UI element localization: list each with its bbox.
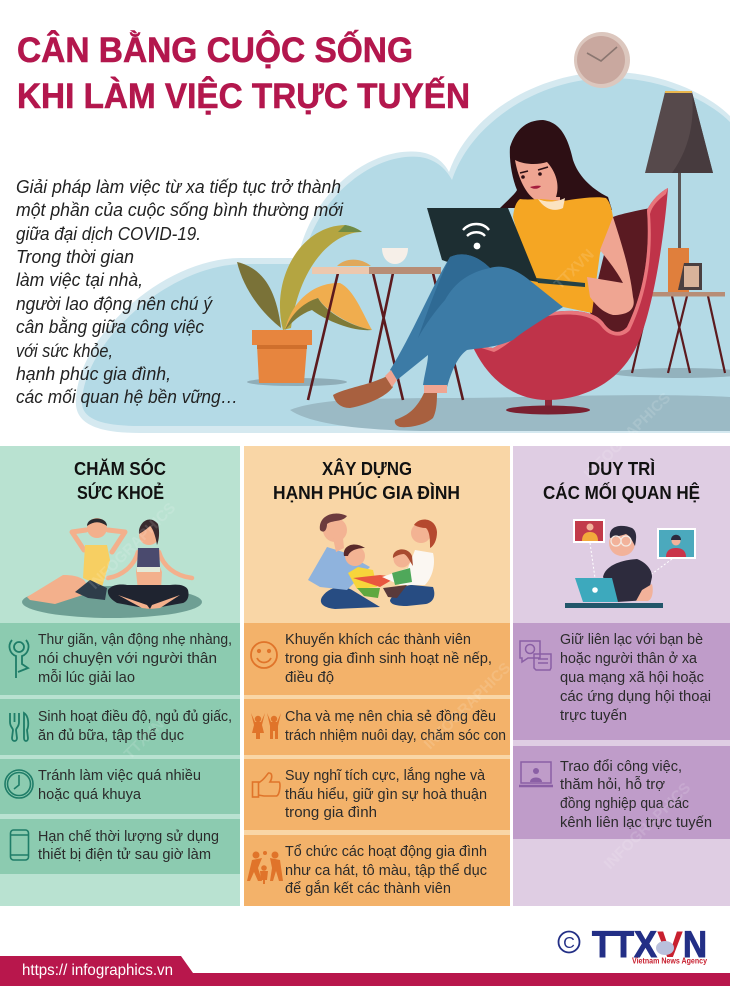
heading: maintaining relationships: [543, 458, 700, 503]
row: keep in touch: các ứng dụng hội thoại: [560, 688, 711, 705]
row: positive thinking: trong gia đình: [285, 804, 377, 821]
watermarks: INFOGRAPHICS: [601, 779, 694, 873]
row: limit devices: Hạn chế thời lượng sử dụng: [38, 828, 219, 845]
icon: smiley: [251, 642, 277, 668]
row: keep in touch: Giữ liên lạc với bạn bè: [560, 631, 703, 648]
row: family activities: [244, 835, 510, 906]
heading: maintaining relationships: CÁC MỐI QUAN HỆ: [543, 482, 700, 503]
row: share parenting: trách nhiệm nuôi dạy, chăm sóc con: [285, 727, 506, 744]
logo: TTXVN copyright: TTX: [592, 924, 657, 965]
watermarks: INFOGRAPHICS: [421, 659, 514, 753]
heading: health care: CHĂM SÓC: [74, 458, 166, 479]
icon: family playing: [247, 851, 283, 884]
row: family activities: như ca hát, tô màu, tập thể dục: [285, 862, 487, 879]
intro text block: làm việc tại nhà,: [16, 270, 143, 290]
row: work exchange: thăm hỏi, hỗ trợ: [560, 776, 665, 793]
intro text block: người lao động nên chú ý: [16, 294, 213, 314]
logo: TTXVN copyright: C: [563, 935, 575, 952]
icon: clock: [5, 770, 33, 798]
panel: maintaining relationships: [513, 446, 730, 906]
watermarks: [86, 246, 694, 873]
row: family activities: Tổ chức các hoạt động gia đình: [285, 843, 487, 860]
heading: family happiness: [273, 458, 460, 503]
title: KHI LÀM VIỆC TRỰC TUYẾN: [17, 76, 470, 116]
row: routine: ăn đủ bữa, tập thể dục: [38, 727, 184, 744]
row: relax: Thư giãn, vận động nhẹ nhàng,: [38, 631, 232, 648]
panel: health care: [0, 446, 240, 906]
icon: laptop video meeting: [519, 762, 553, 786]
illustration: couple exercising: [22, 518, 202, 618]
icon: chat bubbles: [520, 641, 551, 670]
illustration: woman with laptop: [333, 120, 634, 427]
intro text block: một phần của cuộc sống bình thường mới: [16, 200, 344, 220]
row: encourage: trong gia đình sinh hoạt nề nếp,: [285, 650, 492, 667]
footer band with URL: [0, 956, 730, 986]
row: keep in touch: hoặc người thân ở xa: [560, 650, 698, 667]
icon: fork and knife: [10, 713, 28, 741]
icon: thumbs up: [252, 773, 280, 797]
title: [17, 30, 470, 116]
intro text block: cân bằng giữa công việc: [16, 317, 204, 337]
heading: family happiness: XÂY DỰNG: [322, 458, 412, 479]
title: CÂN BẰNG CUỘC SỐNG: [17, 30, 413, 70]
heading: family happiness: HẠNH PHÚC GIA ĐÌNH: [273, 482, 460, 503]
footer band with URL: https:// infographics.vn: [22, 962, 173, 979]
icon: smartphone: [10, 830, 28, 860]
watermarks: TTXVN: [121, 716, 168, 763]
illustration: man on video call: [565, 519, 696, 608]
heading: health care: [74, 458, 166, 503]
logo: TTXVN copyright: N: [683, 924, 707, 965]
row: keep in touch: qua mạng xã hội hoặc: [560, 669, 704, 686]
background cloud shape: [76, 72, 730, 433]
intro text block: [16, 177, 344, 407]
row: routine: Sinh hoạt điều độ, ngủ đủ giấc,: [38, 708, 232, 725]
row: work exchange: đồng nghiệp qua các: [560, 795, 689, 812]
icon: wall clock: [574, 32, 630, 88]
row: positive thinking: [244, 759, 510, 830]
row: work exchange: Trao đổi công việc,: [560, 758, 682, 775]
row: work exchange: kênh liên lạc trực tuyến: [560, 814, 712, 831]
intro text block: các mối quan hệ bền vững…: [16, 387, 238, 407]
row: avoid overwork: Tránh làm việc quá nhiều: [38, 767, 201, 784]
heading: maintaining relationships: DUY TRÌ: [588, 458, 655, 479]
row: positive thinking: Suy nghĩ tích cực, lắng nghe và: [285, 767, 486, 784]
intro text block: Trong thời gian: [16, 247, 134, 267]
row: work exchange: [513, 746, 730, 839]
row: relax: nói chuyện với người thân: [38, 650, 217, 667]
row: share parenting: Cha và mẹ nên chia sẻ đồng đều: [285, 708, 496, 725]
row: routine: [0, 699, 240, 755]
row: encourage: điều độ: [285, 669, 334, 686]
watermarks: INFOGRAPHICS: [581, 389, 674, 483]
row: keep in touch: trực tuyến: [560, 707, 627, 724]
logo: TTXVN copyright: [558, 924, 707, 966]
intro text block: giữa đại dịch COVID-19.: [16, 224, 201, 244]
row: relax: [0, 623, 240, 695]
icon: parents with raised arms: [251, 713, 281, 739]
logo: TTXVN copyright: V: [657, 924, 683, 965]
illustration: floor lamp and side table: [632, 91, 725, 373]
row: encourage: [244, 623, 510, 695]
watermarks: TTXVN: [551, 246, 598, 293]
row: limit devices: [0, 819, 240, 874]
row: positive thinking: thấu hiểu, giữ gìn sự hoà thuận: [285, 786, 487, 803]
intro text block: Giải pháp làm việc từ xa tiếp tục trở thành: [16, 177, 341, 197]
row: relax: mỗi lúc giải lao: [38, 669, 135, 686]
intro text block: hạnh phúc gia đình,: [16, 364, 171, 384]
heading: health care: SỨC KHOẺ: [77, 482, 164, 503]
panel: family happiness: [244, 446, 510, 906]
row: family activities: để gắn kết các thành viên: [285, 880, 451, 897]
illustration: potted plant: [237, 225, 372, 383]
intro text block: với sức khỏe,: [16, 341, 113, 361]
icon: yoga pose: [9, 640, 29, 678]
row: keep in touch: [513, 623, 730, 740]
illustration: family reading: [308, 514, 437, 609]
illustration: coffee table with cup: [308, 248, 463, 400]
row: avoid overwork: [0, 759, 240, 814]
row: share parenting: [244, 699, 510, 755]
watermarks: INFOGRAPHICS: [86, 499, 179, 593]
row: limit devices: thiết bị điện tử sau giờ làm: [38, 846, 211, 863]
row: avoid overwork: hoặc quá khuya: [38, 786, 142, 803]
row: encourage: Khuyến khích các thành viên: [285, 631, 471, 648]
illustration: red egg chair: [472, 188, 668, 414]
logo: TTXVN copyright: Vietnam News Agency: [632, 956, 707, 966]
